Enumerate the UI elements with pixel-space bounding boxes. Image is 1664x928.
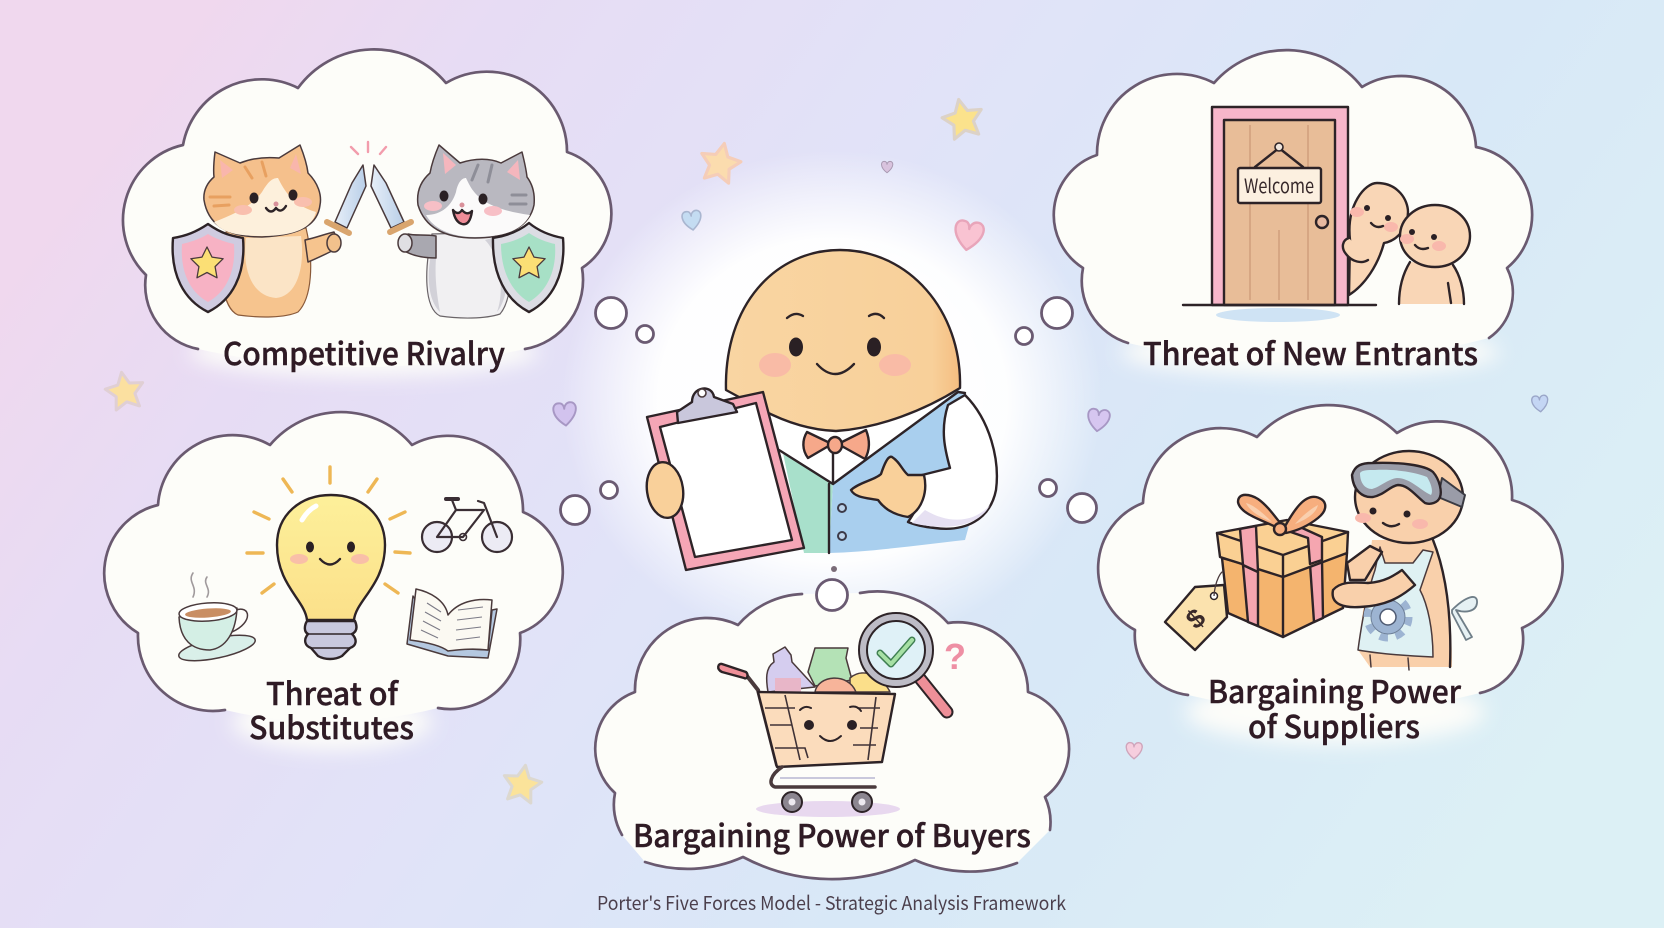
welcome sign [1238, 143, 1321, 203]
icon: orange cat with sword and shield [173, 145, 366, 317]
grey cat sword [371, 165, 412, 252]
groceries [767, 647, 890, 692]
green shield [493, 223, 563, 312]
title: threat of substitutes: Substitutes [249, 703, 414, 748]
worker arms [1333, 546, 1415, 607]
cart frame and wheels [771, 767, 875, 787]
star decorations [103, 95, 986, 804]
title: threat of substitutes: Threat of [266, 669, 399, 714]
orange cat body [204, 145, 340, 317]
icon: supplier worker [1333, 451, 1477, 670]
icon: central mascot holding clipboard [643, 250, 997, 570]
icon: shopping cart with groceries [718, 647, 900, 817]
title: bargaining power of suppliers [1208, 667, 1461, 747]
footer caption: Porter's Five Forces Model - Strategic Analysis Framework [597, 889, 1066, 916]
icon: smiling light bulb [247, 467, 410, 659]
title: bargaining power of suppliers: of Suppliers [1248, 702, 1420, 747]
icon: welcome door [1183, 107, 1376, 322]
worker body [1358, 540, 1452, 667]
price tag: $ [1180, 603, 1211, 635]
icon: peeking person [1343, 183, 1408, 295]
icon: second person [1399, 205, 1470, 304]
icon: question mark: ? [944, 636, 966, 677]
cart handle [747, 676, 777, 765]
cart basket [758, 692, 895, 767]
icon: grey cat with sword and shield [371, 145, 563, 318]
cloud: bargaining power of suppliers [1098, 405, 1563, 744]
mascot bow tie [803, 430, 869, 459]
price tag [1165, 572, 1227, 650]
mascot right arm and hand [851, 395, 997, 529]
mascot body vest [770, 390, 990, 553]
worker head [1352, 451, 1465, 543]
mascot left hand [643, 460, 687, 520]
title: bargaining power of buyers: Bargaining Power of Buyers [633, 811, 1031, 856]
blank clipboard [647, 388, 804, 570]
title: competitive rivalry: Competitive Rivalry [223, 329, 505, 374]
grey cat body [403, 145, 534, 318]
thought bubbles [560, 298, 1096, 610]
cloud: threat of new entrants [1054, 50, 1532, 376]
icon: magnifying glass with check [863, 617, 947, 712]
title: threat of substitutes [249, 669, 414, 748]
orange cat sword [327, 165, 366, 252]
cloud: threat of substitutes [104, 412, 563, 750]
welcome sign: Welcome [1244, 170, 1314, 199]
icon: tea cup [177, 573, 257, 666]
title: bargaining power of suppliers: Bargaining Power [1208, 667, 1461, 712]
cloud: bargaining power of buyers [595, 591, 1069, 879]
heart decorations [553, 161, 1549, 759]
pink shield [173, 224, 243, 312]
cloud: competitive rivalry [123, 49, 611, 376]
icon: bicycle [422, 499, 512, 552]
title: threat of new entrants: Threat of New Entrants [1143, 329, 1478, 374]
bulb rays [247, 467, 410, 593]
icon: clash sparks [351, 142, 386, 154]
mascot head [726, 250, 960, 431]
worker apron [1358, 547, 1477, 670]
icon: gift box with price tag [1165, 495, 1348, 650]
icon: open book [407, 589, 497, 658]
central white glow [562, 150, 1102, 650]
